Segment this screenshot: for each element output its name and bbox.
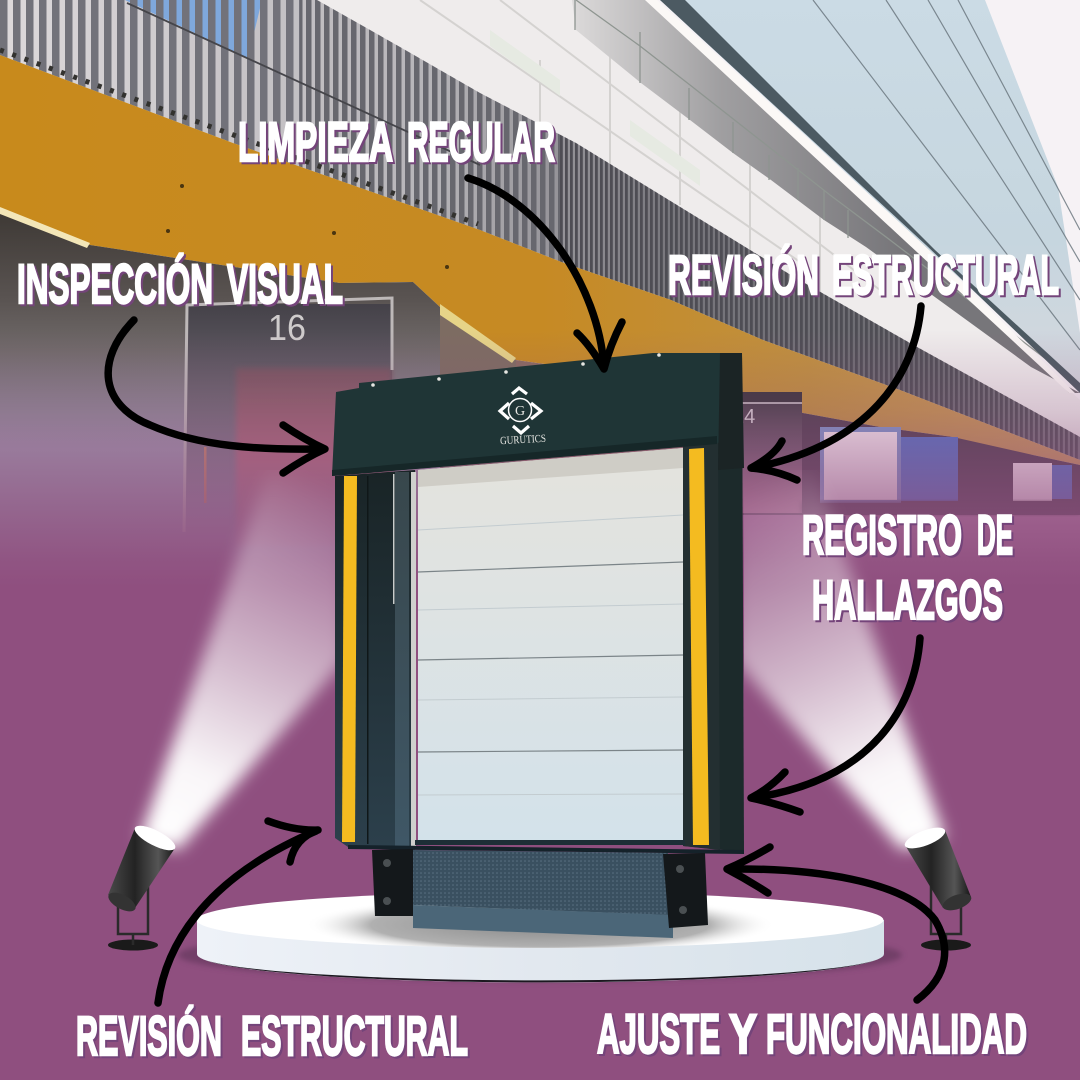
label: registro de hallazgos: [802, 503, 1013, 631]
label: ajuste y funcionalidad: [597, 1002, 1027, 1065]
door panel lines: [418, 562, 683, 752]
background photo: logistics building: 14: [733, 406, 755, 428]
right yellow strip: [689, 448, 709, 845]
left spotlight beam: [130, 478, 335, 860]
logo: Gurutics: [500, 388, 546, 447]
label: revisión estructural inferior: [76, 1004, 468, 1067]
arrow: inspección visual: [108, 320, 325, 473]
vertical slat band: [0, 0, 1080, 460]
label: ajuste y funcionalidad: Y: [729, 1002, 757, 1065]
canopy: [332, 353, 742, 476]
arrow: registro de hallazgos: [751, 638, 920, 812]
door number 16: 16: [268, 307, 306, 348]
label: inspección visual: VISUAL: [227, 252, 343, 315]
infographic scene: DE: [977, 503, 1013, 566]
logo: Gurutics: G: [515, 404, 525, 419]
left spotlight: [105, 821, 178, 950]
arrow: ajuste y funcionalidad: [727, 847, 945, 1000]
left post: [335, 470, 415, 850]
label: revisión estructural superior: [668, 243, 1059, 306]
docks on the right: [743, 392, 1080, 590]
label: inspección visual: INSPECCIÓN: [17, 252, 213, 315]
arrow: revisión estructural inferior: [158, 821, 318, 1003]
arrow: revisión estructural superior: [751, 306, 921, 480]
label: ajuste y funcionalidad: AJUSTE: [597, 1002, 720, 1065]
concrete wall: [0, 209, 440, 590]
left yellow strip: [342, 476, 357, 842]
dock shelter: [332, 353, 744, 938]
right spotlight: [902, 823, 973, 950]
dock bay 16: [186, 304, 392, 544]
door panel: [418, 448, 683, 842]
fade of the photo into purple: [0, 330, 1080, 600]
label: revisión estructural inferior: REVISIÓN: [76, 1004, 222, 1067]
soffit under the upper facade: [572, 0, 1080, 393]
canopy rivets: [371, 353, 661, 387]
platform: [178, 892, 902, 983]
arrow: limpieza regular: [468, 178, 622, 369]
label: revisión estructural superior: REVISIÓN: [668, 243, 819, 306]
background photo: logistics building: [0, 0, 1080, 600]
right spotlight beam: [744, 476, 954, 860]
label: limpieza regular: LIMPIEZA: [238, 110, 393, 173]
label: revisión estructural inferior: ESTRUCTURAL: [241, 1004, 468, 1067]
logo: Gurutics: GURUTICS: [500, 433, 546, 447]
dock leveler: [372, 849, 708, 938]
door top band: [418, 448, 683, 487]
orange soffit: [0, 55, 1080, 465]
right post: [683, 353, 744, 852]
label: limpieza regular: REGULAR: [407, 110, 555, 173]
